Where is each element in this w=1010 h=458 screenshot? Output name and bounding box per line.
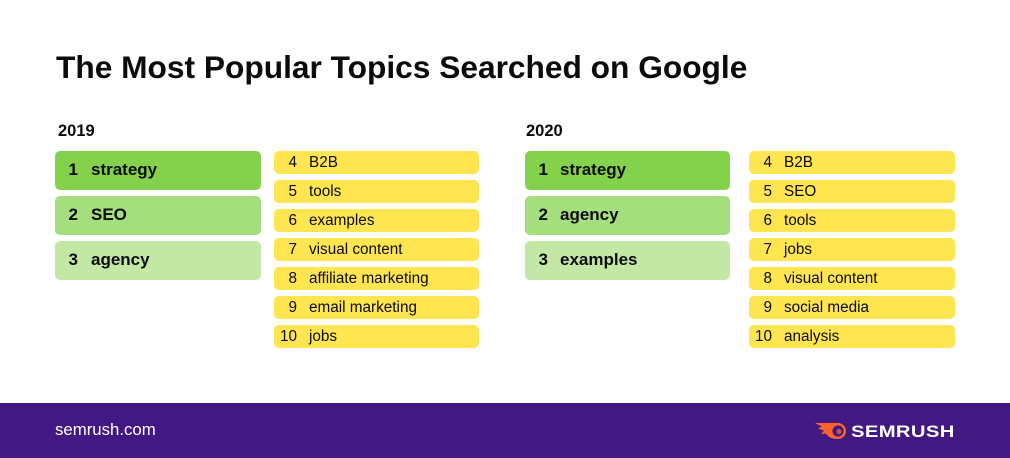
icon: semrush fireball xyxy=(815,423,846,439)
rank 3: examples xyxy=(560,250,638,269)
rank 6 xyxy=(274,209,479,232)
panel: 2019 xyxy=(55,122,479,348)
rank 10: 10 xyxy=(755,328,772,345)
rank 5: tools xyxy=(309,183,341,200)
rank 6: 6 xyxy=(763,212,772,229)
rank 8: 8 xyxy=(763,270,772,287)
rank 2 xyxy=(55,196,261,235)
title: The Most Popular Topics Searched on Google xyxy=(56,49,747,85)
rank 4: 4 xyxy=(763,154,772,171)
footer bar xyxy=(0,403,1010,458)
rank 10 xyxy=(749,325,955,348)
rank 7: visual content xyxy=(309,241,403,258)
rank 8 xyxy=(749,267,955,290)
rank 4 xyxy=(274,151,479,174)
rank 1: 1 xyxy=(69,160,78,179)
rank 7 xyxy=(749,238,955,261)
rank 7: jobs xyxy=(784,241,812,258)
rank 9 xyxy=(749,296,955,319)
rank 10: analysis xyxy=(784,328,839,345)
rank 3 xyxy=(55,241,261,280)
rank 8: 8 xyxy=(288,270,297,287)
rank 9 xyxy=(274,296,479,319)
rank 9: 9 xyxy=(763,299,772,316)
heading: 2019: 2019 xyxy=(58,122,95,140)
rank 7: 7 xyxy=(763,241,772,258)
rank 6: examples xyxy=(309,212,374,229)
panel: 2020 xyxy=(525,122,955,348)
rank 7 xyxy=(274,238,479,261)
rank 3: agency xyxy=(91,250,150,269)
rank 10: 10 xyxy=(280,328,297,345)
rank 3 xyxy=(525,241,730,280)
rank 9: email marketing xyxy=(309,299,417,316)
rank 2: agency xyxy=(560,205,619,224)
heading: 2020: 2020 xyxy=(526,122,563,140)
rank 6: 6 xyxy=(288,212,297,229)
rank 1 xyxy=(55,151,261,190)
rank 8: affiliate marketing xyxy=(309,270,429,287)
rank 4: 4 xyxy=(288,154,297,171)
rank 5 xyxy=(749,180,955,203)
footer url: semrush.com xyxy=(55,420,156,439)
rank 5: 5 xyxy=(288,183,297,200)
rank 5: SEO xyxy=(784,183,816,200)
rank 9: social media xyxy=(784,299,869,316)
rank 6: tools xyxy=(784,212,816,229)
rank 2 xyxy=(525,196,730,235)
rank 1 xyxy=(525,151,730,190)
rank 1: strategy xyxy=(91,160,157,179)
rank 5 xyxy=(274,180,479,203)
logo wordmark: SEMRUSH xyxy=(851,422,955,441)
rank 5: 5 xyxy=(763,183,772,200)
rank 4: B2B xyxy=(309,154,338,171)
rank 3: 3 xyxy=(69,250,78,269)
rank 6 xyxy=(749,209,955,232)
rank 1: 1 xyxy=(539,160,548,179)
rank 8 xyxy=(274,267,479,290)
rank 9: 9 xyxy=(288,299,297,316)
rank 10: jobs xyxy=(309,328,337,345)
rank 3: 3 xyxy=(539,250,548,269)
rank 4 xyxy=(749,151,955,174)
rank 8: visual content xyxy=(784,270,878,287)
rank 7: 7 xyxy=(288,241,297,258)
rank 2: 2 xyxy=(69,205,78,224)
rank 10 xyxy=(274,325,479,348)
rank 2: 2 xyxy=(539,205,548,224)
rank 2: SEO xyxy=(91,205,127,224)
rank 1: strategy xyxy=(560,160,626,179)
rank 4: B2B xyxy=(784,154,813,171)
